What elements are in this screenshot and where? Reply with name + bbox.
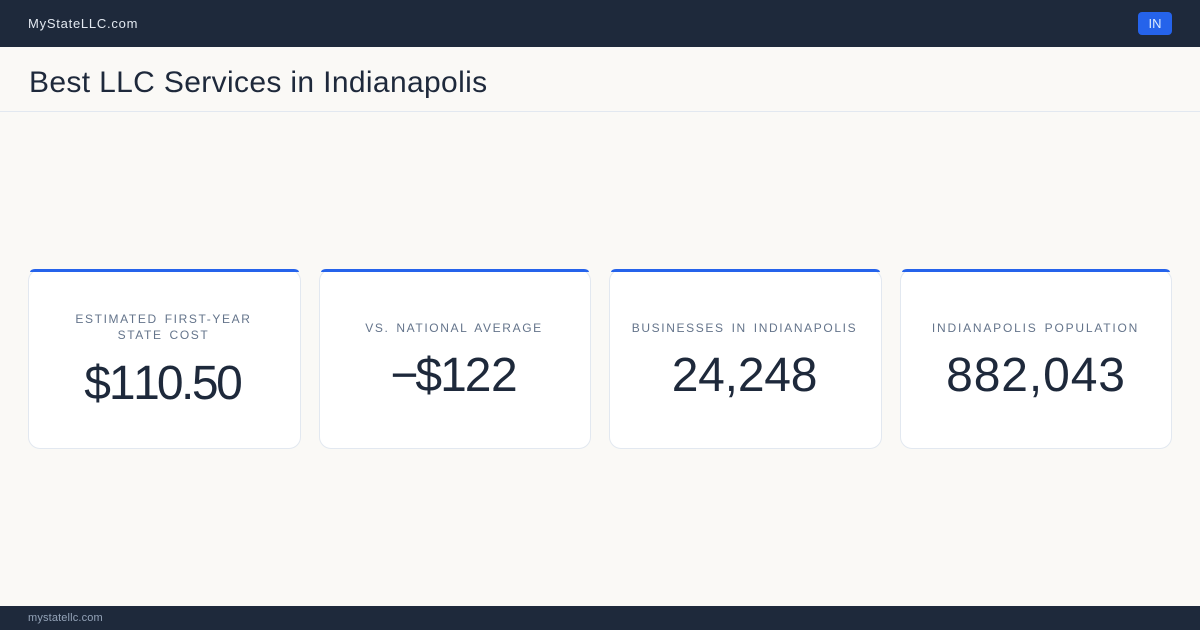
footer bar: [0, 606, 1200, 630]
label: ESTIMATED FIRST-YEAR: [75, 312, 252, 326]
label: VS. NATIONAL AVERAGE: [365, 321, 543, 335]
value: 882,043: [946, 349, 1126, 402]
value: $110.50: [84, 357, 243, 410]
label: [75, 312, 252, 342]
value: −$122: [390, 349, 518, 402]
value: 24,248: [672, 349, 817, 402]
footer url: mystatellc.com: [28, 612, 103, 624]
brand name: MyStateLLC.com: [28, 16, 138, 31]
state badge: [1138, 12, 1172, 35]
label: INDIANAPOLIS POPULATION: [932, 321, 1139, 335]
label: STATE COST: [118, 328, 209, 342]
stat card: Indianapolis population: [900, 269, 1172, 449]
stat card: vs. national average: [319, 269, 591, 449]
top header bar: [0, 0, 1200, 47]
stat card: businesses in Indianapolis: [609, 269, 882, 449]
state badge: IN: [1148, 16, 1162, 31]
label: BUSINESSES IN INDIANAPOLIS: [632, 321, 857, 335]
stat card: estimated first-year state cost: [28, 269, 301, 449]
title band: [0, 47, 1200, 112]
page title: Best LLC Services in Indianapolis: [29, 66, 487, 99]
